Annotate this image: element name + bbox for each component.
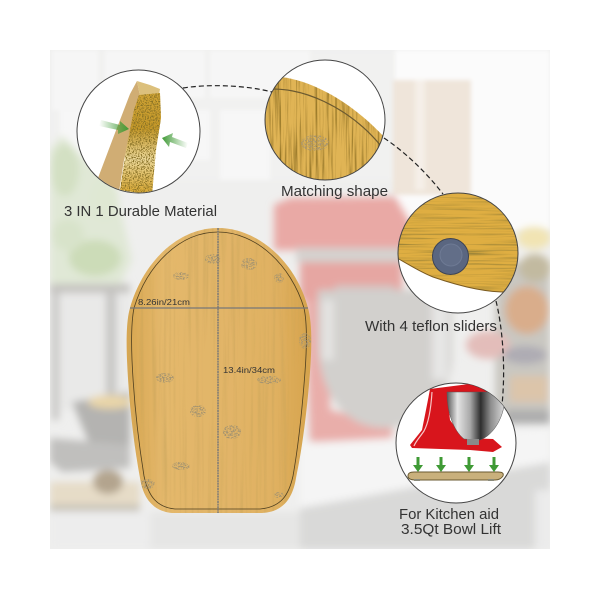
dashed connector: material to shape	[183, 86, 272, 92]
left lower dark scene	[50, 290, 130, 410]
caption: bowl lift: For Kitchen aid	[399, 506, 499, 523]
caption: durable material: 3 IN 1 Durable Material	[64, 203, 217, 220]
dashed connector: sliders to bowl lift	[496, 301, 504, 405]
right food	[495, 262, 550, 422]
panel: durable material detail circle	[77, 70, 200, 195]
background: faded kitchen photo	[50, 50, 551, 549]
left plant	[50, 135, 132, 288]
inner face of board	[98, 81, 140, 192]
bamboo knots	[139, 254, 311, 498]
top rim of board	[137, 81, 160, 96]
dimension line: width	[130, 307, 308, 309]
icon: red mixer body	[410, 383, 502, 452]
silver bowl	[318, 290, 452, 428]
groove line	[274, 88, 380, 144]
panel: matching shape detail circle	[262, 60, 385, 185]
textured board edge	[120, 93, 161, 195]
board body	[127, 228, 311, 513]
icon: right green arrow	[162, 133, 188, 148]
dimension label: width: 8.26in/21cm	[138, 297, 190, 307]
icon: green arrows	[413, 457, 499, 472]
dimension line: height	[217, 228, 219, 513]
red mixer	[274, 197, 412, 250]
caption: matching shape: Matching shape	[281, 183, 388, 200]
caption: teflon sliders: With 4 teflon sliders	[365, 318, 497, 335]
juice groove	[132, 232, 306, 509]
icon: left green arrow	[99, 120, 129, 134]
caption: bowl lift: 3.5Qt Bowl Lift	[401, 521, 502, 538]
panel: bowl lift detail circle	[396, 383, 516, 503]
dimension label: height: 13.4in/34cm	[223, 365, 275, 375]
dashed connector: shape to sliders	[384, 138, 443, 194]
icon: board side view	[408, 472, 503, 480]
icon: steel bowl	[447, 392, 505, 440]
knot	[301, 135, 329, 151]
icon: grey slider	[432, 238, 468, 274]
counter and lower area	[314, 434, 396, 450]
panel: bamboo board with dimensions	[127, 228, 311, 513]
panel: teflon slider detail circle	[396, 190, 520, 313]
